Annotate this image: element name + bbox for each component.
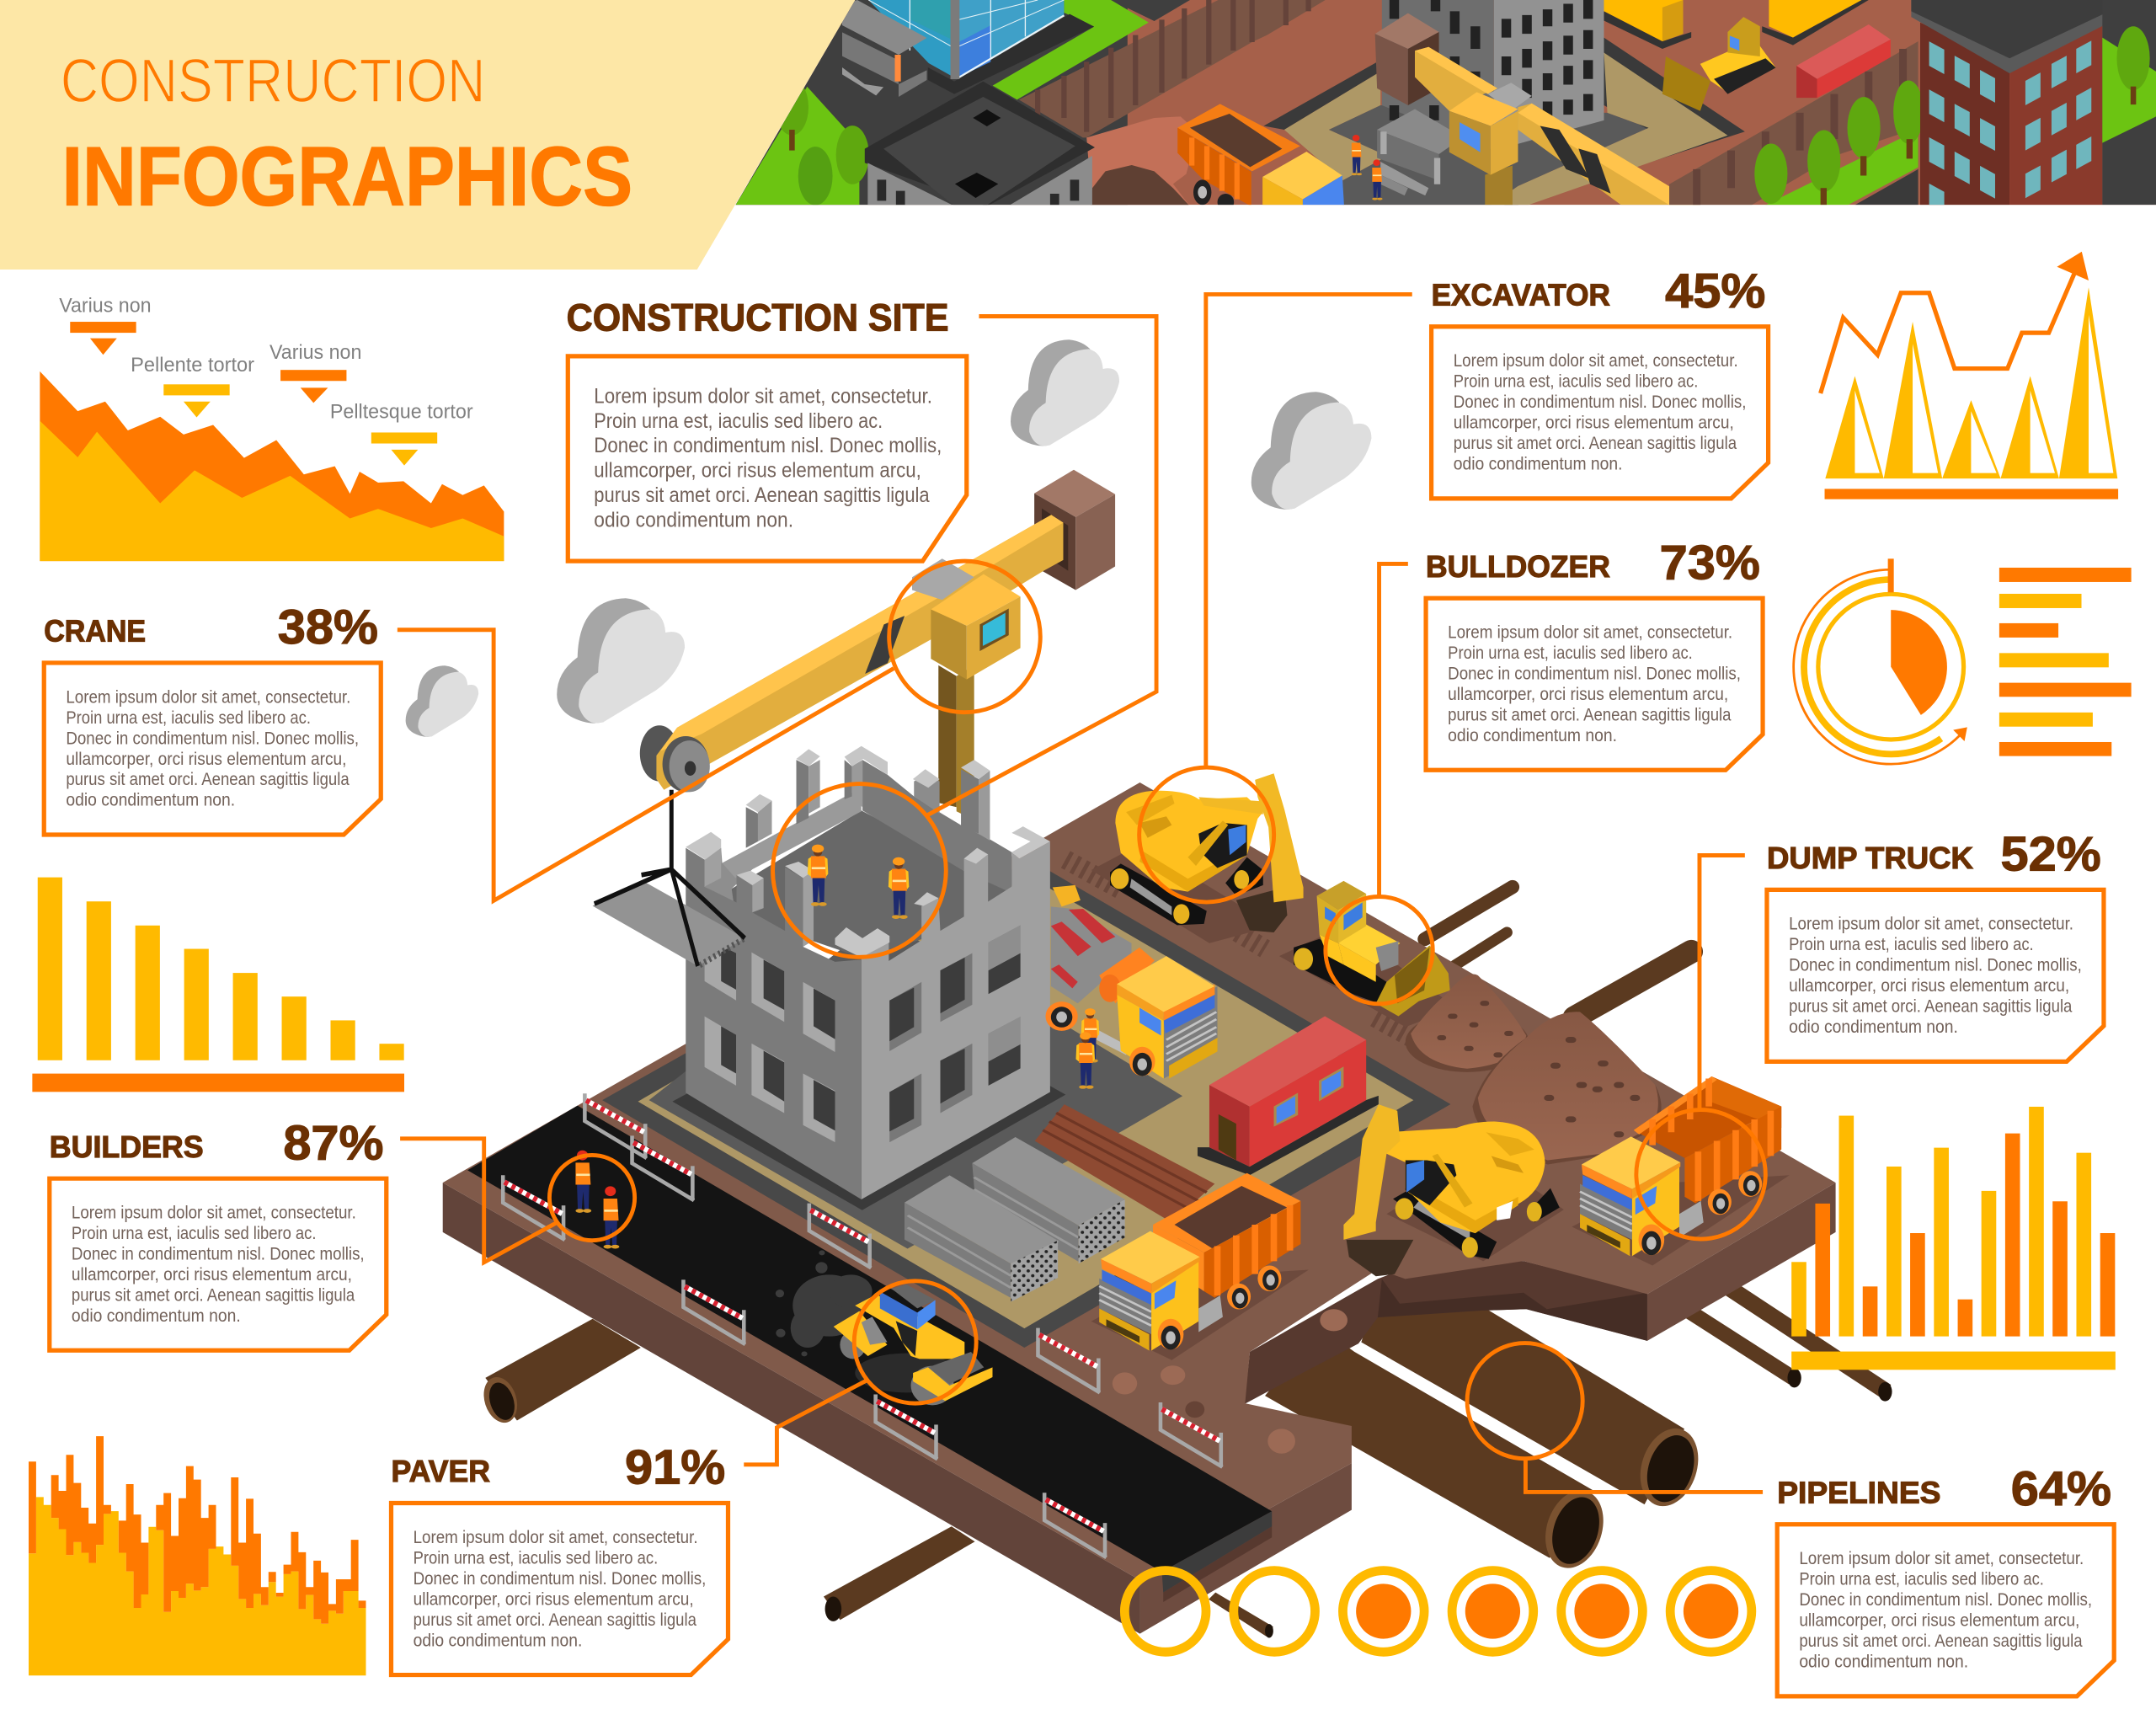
- panel: builders: Lorem ipsum dolor sit amet, consectetur.: [72, 1204, 356, 1223]
- panel: paver: Lorem ipsum dolor sit amet, consectetur.: [414, 1528, 698, 1547]
- panel: crane: purus sit amet orci. Aenean sagittis ligula: [66, 770, 350, 789]
- panel: excavator: odio condimentum non.: [1454, 455, 1623, 474]
- panel: bulldozer: [1426, 536, 1763, 770]
- paver leader: [744, 1281, 976, 1465]
- panel: pipelines: [1777, 1462, 2114, 1696]
- crane mast behind the building: [938, 665, 974, 820]
- crane cabin: [912, 558, 1021, 680]
- panel: pipelines: ullamcorper, orci risus elementum arcu,: [1799, 1611, 2079, 1631]
- strip workers: [1352, 135, 1362, 175]
- site vehicles: [1035, 773, 1790, 1360]
- panel: pipelines: Proin urna est, iaculis sed libero ac.: [1799, 1570, 2044, 1589]
- dump truck leader: [1636, 856, 1765, 1239]
- crane hook and slab: [593, 790, 744, 966]
- panel: dump truck: Proin urna est, iaculis sed libero ac.: [1789, 935, 2034, 954]
- panel: dump truck: purus sit amet orci. Aenean sagittis ligula: [1789, 997, 2073, 1017]
- builders leader: [400, 1139, 635, 1263]
- label: pellente tortor: [131, 354, 254, 418]
- panel: dump truck: DUMP TRUCK: [1767, 841, 1973, 875]
- peaks chart with arrow: [1821, 252, 2118, 499]
- panel: dump truck: odio condimentum non.: [1789, 1017, 1958, 1037]
- road workers: [575, 1151, 619, 1248]
- red site trailer: [1198, 1017, 1379, 1175]
- panel: bulldozer: Donec in condimentum nisl. Donec mollis,: [1448, 665, 1741, 684]
- panel: bulldozer: BULLDOZER: [1426, 549, 1610, 584]
- panel: bulldozer: Proin urna est, iaculis sed libero ac.: [1448, 644, 1693, 663]
- panel: crane: CRANE: [44, 614, 146, 649]
- panel: builders: BUILDERS: [50, 1130, 204, 1164]
- panel: dump truck: 52%: [2001, 827, 2101, 881]
- strip dump truck: [1177, 104, 1344, 211]
- panel: builders: ullamcorper, orci risus elementum arcu,: [72, 1265, 352, 1284]
- concrete slabs: [905, 1137, 1125, 1302]
- label: pelltesque tortor: Pelltesque tortor: [330, 400, 473, 423]
- panel: bulldozer: ullamcorper, orci risus elementum arcu,: [1448, 685, 1728, 704]
- workers by the mixer: [1075, 1008, 1099, 1089]
- panel: paver: purus sit amet orci. Aenean sagittis ligula: [414, 1610, 696, 1630]
- clouds: [406, 339, 1371, 737]
- crane pulley back disc: [640, 725, 679, 782]
- panel: bulldozer: purus sit amet orci. Aenean sagittis ligula: [1448, 706, 1732, 725]
- bulldozer: [1279, 881, 1456, 1027]
- slab stack 2: [972, 1137, 1125, 1263]
- panel: dump truck: [1767, 827, 2104, 1061]
- panel: paver: [391, 1441, 728, 1675]
- panel: bulldozer: Lorem ipsum dolor sit amet, consectetur.: [1448, 623, 1732, 643]
- panel: crane: Proin urna est, iaculis sed libero ac.: [66, 708, 311, 728]
- dump truck empty: [1572, 1076, 1790, 1265]
- panel: crane: 38%: [278, 601, 378, 654]
- building under construction: [686, 746, 1050, 1199]
- panel: builders: purus sit amet orci. Aenean sagittis ligula: [72, 1285, 355, 1305]
- panel: pipelines: Donec in condimentum nisl. Donec mollis,: [1799, 1590, 2092, 1610]
- icon: worker on roof, right: [889, 857, 909, 919]
- panel: pipelines: PIPELINES: [1777, 1475, 1940, 1509]
- label: varius non 2: Varius non: [270, 341, 361, 364]
- panel: crane: Donec in condimentum nisl. Donec mollis,: [66, 729, 359, 748]
- construction site leader: [773, 317, 1156, 957]
- panel: crane: [44, 601, 381, 835]
- panel: builders: 87%: [283, 1116, 384, 1170]
- construction slab and lots: [602, 859, 1450, 1348]
- panel: dump truck: Lorem ipsum dolor sit amet, consectetur.: [1789, 915, 2073, 934]
- panel: builders: odio condimentum non.: [72, 1306, 241, 1326]
- panel: dump truck: Donec in condimentum nisl. Donec mollis,: [1789, 956, 2082, 975]
- panel: excavator: Proin urna est, iaculis sed libero ac.: [1454, 372, 1698, 392]
- crane boom: [656, 515, 1063, 790]
- panel: construction site text: odio condimentum non.: [594, 508, 793, 531]
- slab stack 1: [905, 1175, 1059, 1302]
- panel: excavator: Lorem ipsum dolor sit amet, consectetur.: [1454, 351, 1738, 371]
- dirt pile large: [1472, 1012, 1662, 1165]
- heading: construction site: CONSTRUCTION SITE: [567, 296, 949, 339]
- panel: pipelines: odio condimentum non.: [1799, 1653, 1968, 1672]
- panel: construction site text: ullamcorper, orci risus elementum arcu,: [594, 459, 921, 483]
- panel: excavator: [1432, 264, 1769, 499]
- excavator front: [1343, 1104, 1564, 1276]
- dirt pile small: [1406, 975, 1529, 1072]
- label: pelltesque tortor: [330, 400, 473, 466]
- panel: excavator: 45%: [1665, 264, 1765, 318]
- panel: excavator: Donec in condimentum nisl. Donec mollis,: [1454, 393, 1746, 412]
- panel: excavator: ullamcorper, orci risus elementum arcu,: [1454, 414, 1734, 433]
- panel: crane: Lorem ipsum dolor sit amet, consectetur.: [66, 687, 350, 707]
- panel: bulldozer: 73%: [1660, 536, 1760, 590]
- panel: excavator: purus sit amet orci. Aenean sagittis ligula: [1454, 434, 1737, 453]
- crane pulley front disc: [663, 736, 710, 792]
- excavator leader: [1139, 294, 1412, 902]
- clock gauge chart: [1794, 558, 1967, 764]
- label: varius non 1: Varius non: [59, 295, 152, 318]
- vertical bar chart right: [1791, 1107, 2116, 1370]
- panel: construction site text: purus sit amet orci. Aenean sagittis ligula: [594, 483, 930, 507]
- title line: construction: CONSTRUCTION: [61, 45, 485, 115]
- panel: paver: PAVER: [391, 1454, 490, 1488]
- panel: paver: ullamcorper, orci risus elementum arcu,: [414, 1589, 694, 1609]
- panel: crane: odio condimentum non.: [66, 791, 235, 810]
- panel: paver: Donec in condimentum nisl. Donec mollis,: [414, 1569, 706, 1589]
- label: varius non 2: [270, 341, 361, 403]
- panel: pipelines: Lorem ipsum dolor sit amet, consectetur.: [1799, 1549, 2084, 1568]
- panel: paver: odio condimentum non.: [414, 1631, 582, 1650]
- bulldozer leader: [1326, 563, 1433, 1004]
- panel: pipelines: purus sit amet orci. Aenean sagittis ligula: [1799, 1632, 2083, 1651]
- panel: pipelines: 64%: [2011, 1462, 2111, 1516]
- panel: paver: Proin urna est, iaculis sed libero ac.: [414, 1548, 658, 1567]
- dump truck loaded: [1091, 1173, 1309, 1360]
- panel: builders: Proin urna est, iaculis sed libero ac.: [72, 1224, 317, 1243]
- descending bar chart: [32, 878, 404, 1092]
- panel: construction site text: [568, 356, 967, 561]
- crane: [593, 470, 1115, 966]
- excavator back: [1091, 773, 1304, 943]
- concrete mixer truck: [1045, 885, 1218, 1079]
- area chart with pointers: [40, 295, 504, 561]
- header banner: [0, 0, 856, 270]
- panel: construction site text: Lorem ipsum dolor sit amet, consectetur.: [594, 384, 932, 408]
- title: [61, 45, 632, 223]
- panel: bulldozer: odio condimentum non.: [1448, 726, 1617, 745]
- horizontal bar chart: [1999, 568, 2132, 756]
- top illustration strip: isometric city: [728, 0, 2156, 211]
- title line: infographics: INFOGRAPHICS: [61, 130, 632, 223]
- pipelines under the platform: [478, 887, 1892, 1637]
- panel: paver: 91%: [625, 1441, 725, 1495]
- crane counterweight: [1034, 470, 1115, 590]
- platform ground: [443, 782, 1836, 1634]
- label: varius non 1: [59, 295, 152, 355]
- label: pellente tortor: Pellente tortor: [131, 354, 254, 377]
- icon: worker on roof, left: [808, 845, 828, 906]
- pipelines leader: [1467, 1343, 1763, 1492]
- panel: builders: [50, 1116, 387, 1350]
- road asphalt: [467, 1106, 1272, 1602]
- panel: construction site text: Proin urna est, iaculis sed libero ac.: [594, 409, 883, 433]
- ring indicators: [1124, 1571, 1752, 1652]
- panel: construction site text: Donec in condimentum nisl. Donec mollis,: [594, 434, 942, 457]
- road roller paver: [776, 1250, 992, 1405]
- panel: crane: ullamcorper, orci risus elementum arcu,: [66, 750, 346, 769]
- panel: excavator: EXCAVATOR: [1432, 277, 1610, 312]
- road barriers: [503, 1093, 1222, 1557]
- panel: dump truck: ullamcorper, orci risus elementum arcu,: [1789, 976, 2069, 996]
- crane leader: [398, 561, 1040, 900]
- wood pile: [1035, 1104, 1214, 1222]
- stepped area chart: [29, 1436, 366, 1675]
- leader lines and highlight circles: [398, 294, 1765, 1492]
- panel: builders: Donec in condimentum nisl. Donec mollis,: [72, 1245, 365, 1264]
